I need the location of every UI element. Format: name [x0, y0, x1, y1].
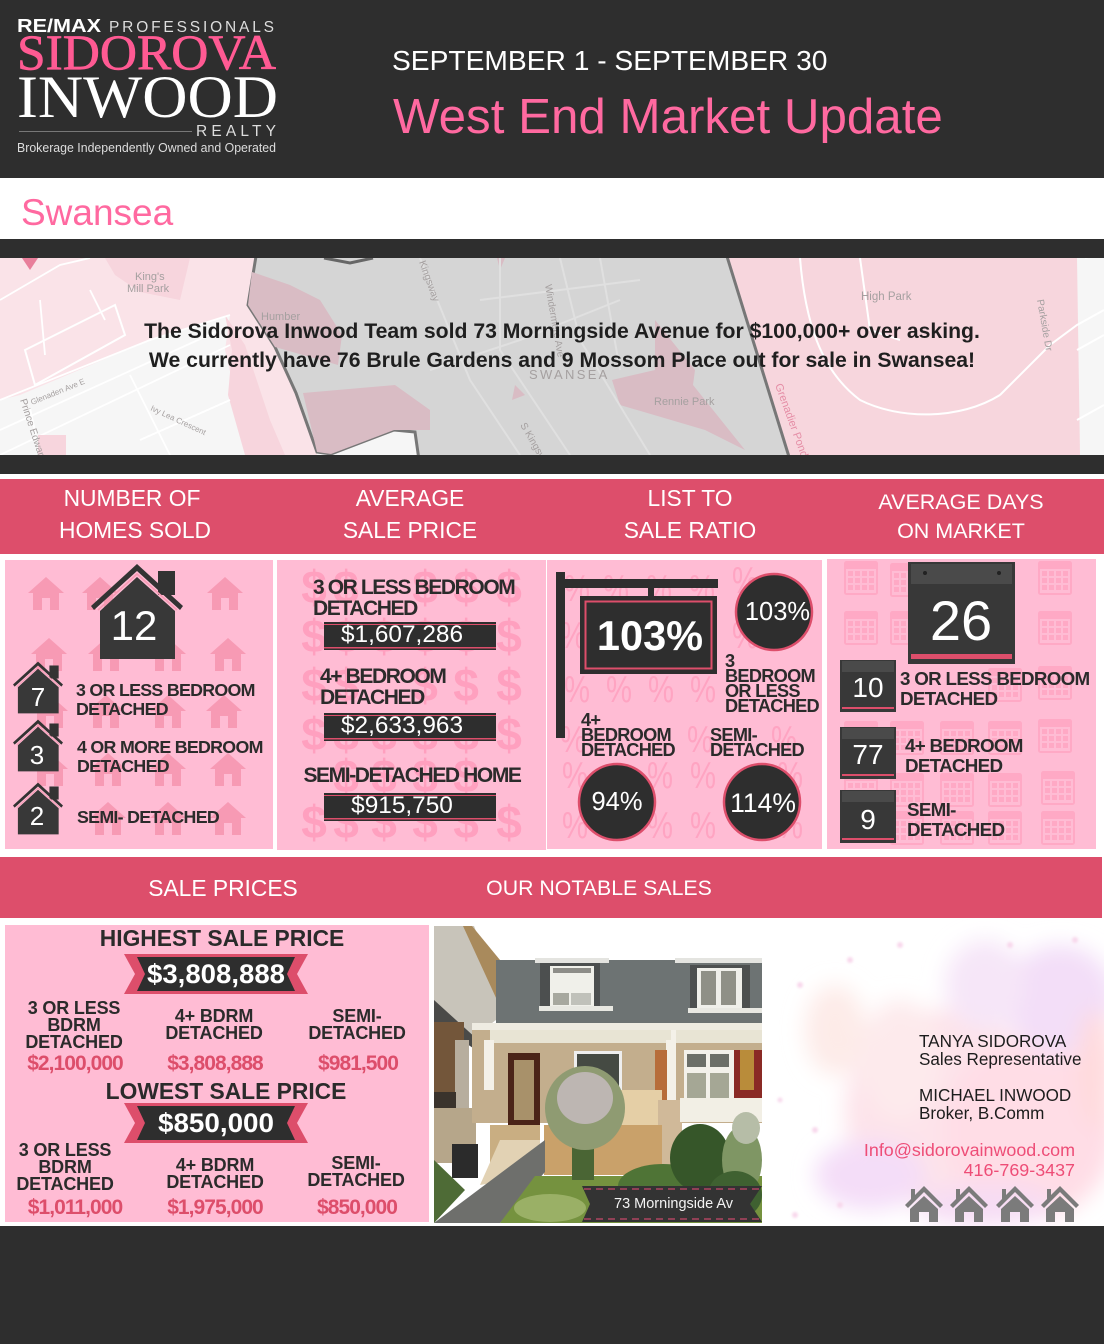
map banner [0, 239, 1104, 474]
stat headings band: AVERAGE [356, 485, 464, 511]
icon: house 2 [13, 783, 63, 834]
contact details: Info@sidorovainwood.com [864, 1140, 1075, 1160]
panel: average sale price: $ [412, 796, 438, 848]
label: 3 bedroom or less: 3 [725, 651, 735, 671]
panel: list to sale ratio: % [732, 615, 758, 657]
label: 3 or less days: 3 OR LESS BEDROOM [900, 668, 1090, 689]
ribbon: highest price: $3,808,888 [147, 959, 285, 989]
circle: 94%: 94% [591, 788, 643, 816]
label: 4 or more [77, 737, 263, 776]
photo caption ribbon [582, 1186, 762, 1222]
panel: homes sold [5, 560, 273, 849]
panel: average sale price: $ [453, 561, 479, 613]
icon: house 3 [13, 720, 63, 771]
neighbourhood heading: Swansea [21, 192, 174, 233]
label: 4+ days: DETACHED [905, 755, 1002, 776]
contact splash panel [778, 937, 1104, 1225]
panel: list to sale ratio: % [564, 669, 590, 711]
panel: average sale price: $ [371, 750, 397, 802]
label: 4+ price: 4+ BEDROOM [320, 665, 446, 688]
section band [0, 857, 1102, 918]
icon: calendar 10: 10 [852, 672, 884, 703]
map labels: Glenaden Ave E [29, 377, 86, 407]
panel: list to sale ratio: % [771, 719, 797, 761]
col: 3 or less low [16, 1140, 122, 1219]
map labels: High Park [861, 291, 912, 303]
col: 4+ high: DETACHED [165, 1023, 263, 1043]
heading: highest: HIGHEST SALE PRICE [100, 925, 344, 951]
map labels: Windermere Ave [542, 284, 566, 359]
panel: list to sale ratio: % [687, 719, 713, 761]
panel: list to sale ratio: % [647, 755, 673, 797]
label: 3 bedroom or less [725, 651, 820, 716]
circle: 114% [724, 764, 800, 840]
label: 4+ days: 4+ BEDROOM [905, 735, 1023, 756]
panel: average sale price: $ [412, 610, 438, 662]
icon: large calendar 26 [908, 562, 1015, 664]
col: 4+ low: 4+ BDRM [176, 1155, 254, 1175]
footer band [0, 1226, 1104, 1344]
panel: list to sale ratio: % [777, 805, 803, 847]
main title: West End Market Update [393, 89, 943, 144]
label: 3 bedroom or less: OR LESS [725, 681, 800, 701]
col: semi high: DETACHED [308, 1023, 406, 1043]
stat headings band: LIST TO [648, 485, 732, 511]
col: 4+ high [165, 1006, 264, 1075]
label: 3 or less days: DETACHED [900, 688, 997, 709]
section band: OUR NOTABLE SALES [486, 876, 712, 900]
map message [144, 320, 980, 372]
col: 3 or less high [25, 998, 123, 1075]
col: semi low: SEMI- [331, 1153, 381, 1173]
label: semi-detached [710, 725, 805, 760]
ribbon: lowest price [124, 1103, 308, 1143]
label: semi price: SEMI-DETACHED HOME [303, 764, 522, 787]
icon: calendar 77 [840, 727, 896, 779]
panel: list to sale ratio: % [690, 669, 716, 711]
panel: list to sale ratio: % [732, 560, 758, 602]
label: semi days: SEMI- [907, 799, 956, 820]
panel: list to sale ratio: % [564, 568, 590, 610]
price bar 2: $2,633,963 [341, 712, 463, 739]
label: 3 or less price: 3 OR LESS BEDROOM [313, 576, 515, 599]
icon: house 2: 2 [30, 801, 44, 831]
stat headings band: ON MARKET [897, 519, 1025, 543]
panel: list to sale ratio: % [603, 568, 629, 610]
label: 4+ bedroom [581, 710, 676, 760]
heading: lowest: LOWEST SALE PRICE [106, 1078, 346, 1104]
logo: SIDOROVA [17, 24, 276, 80]
label: 4+ bedroom: 4+ [581, 710, 600, 730]
label: semi: SEMI- DETACHED [77, 807, 220, 827]
circle: 103% [736, 574, 812, 650]
label: 3 or less price: DETACHED [313, 597, 418, 620]
price bar 1: $1,607,286 [341, 621, 463, 648]
col: semi high: $981,500 [318, 1052, 398, 1075]
map labels: Prince Edward [17, 398, 48, 463]
col: semi high: SEMI- [332, 1006, 382, 1026]
panel: list to sale ratio: % [646, 568, 672, 610]
icon: large house 12 [91, 564, 183, 659]
panel: average sale price: $ [412, 750, 438, 802]
label: 3 or less price [313, 576, 515, 620]
panel: average sale price: $ [301, 561, 327, 613]
ribbon: lowest price: $850,000 [158, 1108, 274, 1138]
map message: The Sidorova Inwood Team sold 73 Morningside Avenue for $100,000+ over asking. [144, 320, 980, 343]
date range: SEPTEMBER 1 - SEPTEMBER 30 [392, 44, 827, 76]
label: 3 or less [76, 680, 255, 719]
col: semi low [307, 1153, 405, 1219]
panel: list to sale ratio: % [647, 805, 673, 847]
col: 4+ low [166, 1155, 264, 1219]
panel: list to sale ratio: % [648, 669, 674, 711]
panel: average sale price: $ [371, 708, 397, 760]
icon: hanging sign 103%: 103% [597, 612, 703, 659]
panel: average sale price: $ [333, 796, 359, 848]
contact names: Sales Representative [919, 1050, 1081, 1069]
panel: list to sale ratio: % [606, 669, 632, 711]
label: 4+ days [905, 735, 1023, 776]
icon: large calendar 26: 26 [930, 589, 992, 652]
col: 3 or less low: DETACHED [16, 1174, 114, 1194]
col: 3 or less high: BDRM [47, 1015, 101, 1035]
map labels [17, 259, 1054, 472]
panel: average sale price: $ [301, 796, 327, 848]
col: 3 or less low: $1,011,000 [28, 1196, 122, 1219]
logo: PROFESSIONALS [109, 19, 274, 36]
stat headings band: SALE RATIO [624, 517, 756, 543]
panel: average sale price: $ [496, 659, 522, 711]
icon: house 7 [13, 662, 63, 713]
panel: average sale price: $ [333, 708, 359, 760]
paint spatter [778, 937, 1078, 1218]
logo: RE/MAX [17, 16, 101, 36]
label: 4+ price [320, 665, 446, 709]
col: 4+ low: $1,975,000 [167, 1196, 263, 1219]
header band [0, 0, 1104, 178]
col: 3 or less low: 3 OR LESS [19, 1140, 111, 1160]
price bar 3 [324, 792, 496, 821]
label: 4+ bedroom: BEDROOM [581, 725, 671, 745]
logo [17, 16, 278, 155]
panel: list to sale ratio: % [690, 805, 716, 847]
price bar 3: $915,750 [351, 792, 453, 819]
icon: house 7: 7 [31, 682, 45, 712]
logo: REALTY [196, 123, 276, 140]
label: 4+ price: DETACHED [320, 686, 425, 709]
circle: 94% [579, 764, 655, 840]
label: semi-detached: SEMI- [710, 725, 758, 745]
panel: list to sale ratio: % [690, 755, 716, 797]
price bar 1 [324, 621, 496, 650]
contact names: TANYA SIDOROVA [919, 1032, 1067, 1051]
photo caption ribbon: 73 Morningside Av [614, 1196, 734, 1212]
col: semi low: DETACHED [307, 1170, 405, 1190]
stat headings band [0, 479, 1104, 554]
map labels: Ivy Lea Crescent [149, 404, 208, 438]
map labels: Kingsway [416, 259, 441, 303]
panel: list to sale ratio: % [560, 719, 586, 761]
panel: list to sale ratio: % [777, 755, 803, 797]
contact details [864, 1140, 1075, 1180]
icon: calendar 77: 77 [852, 739, 884, 770]
map message: We currently have 76 Brule Gardens and 9 Mossom Place out for sale in Swansea! [149, 349, 975, 372]
label: 4 or more: 4 OR MORE BEDROOM [77, 737, 263, 757]
panel: list to sale ratio: % [560, 615, 586, 657]
flowering shrub [545, 1066, 625, 1180]
contact names: MICHAEL INWOOD [919, 1086, 1071, 1105]
panel: average sale price: $ [453, 659, 479, 711]
panel: average sale price: $ [301, 610, 327, 662]
label: semi-detached: DETACHED [710, 740, 805, 760]
col: 3 or less high: 3 OR LESS [28, 998, 120, 1018]
panel: average sale price: $ [496, 708, 522, 760]
map labels: SWANSEA [529, 367, 610, 382]
panel: days on market [827, 559, 1096, 849]
panel: list to sale ratio: % [562, 755, 588, 797]
logo: Brokerage Independently Owned and Operated [17, 141, 276, 155]
stat headings band: AVERAGE DAYS [878, 490, 1044, 514]
panel: average sale price: $ [453, 610, 479, 662]
map labels: Parkside Dr [1034, 299, 1054, 353]
col: 3 or less high: $2,100,000 [27, 1052, 123, 1075]
col: 4+ high: $3,808,888 [167, 1052, 264, 1075]
map labels: S Kingsway [517, 421, 553, 472]
label: 3 or less days [900, 668, 1090, 709]
Swansea boundary [248, 250, 790, 460]
panel: average sale price: $ [301, 659, 327, 711]
icon: house 3: 3 [30, 740, 44, 770]
map labels: Humber [261, 311, 300, 323]
panel: list to sale ratio [547, 560, 822, 849]
panel: average sale price [277, 560, 546, 850]
panel: list to sale ratio: % [562, 805, 588, 847]
label: 4 or more: DETACHED [77, 756, 170, 776]
panel: average sale price: $ [453, 708, 479, 760]
panel: average sale price: $ [333, 610, 359, 662]
col: 4+ high: 4+ BDRM [175, 1006, 253, 1026]
contact details: 416-769-3437 [964, 1160, 1075, 1180]
contact names: Broker, B.Comm [919, 1104, 1044, 1123]
stat headings band: SALE PRICE [343, 517, 477, 543]
col: 3 or less low: BDRM [38, 1157, 92, 1177]
label: semi days: DETACHED [907, 819, 1004, 840]
panel: average sale price: $ [412, 708, 438, 760]
col: 3 or less high: DETACHED [25, 1032, 123, 1052]
contact names [919, 1032, 1081, 1123]
panel: average sale price: $ [333, 750, 359, 802]
col: semi low: $850,000 [317, 1196, 397, 1219]
logo: INWOOD [17, 64, 278, 130]
panel: sale prices [5, 925, 429, 1222]
panel: average sale price: $ [333, 561, 359, 613]
panel: average sale price: $ [412, 659, 438, 711]
panel: average sale price: $ [496, 610, 522, 662]
price bar 2 [324, 712, 496, 741]
label: 3 or less: DETACHED [76, 699, 169, 719]
label: 3 or less: 3 OR LESS BEDROOM [76, 680, 255, 700]
panel: average sale price: $ [371, 610, 397, 662]
panel: average sale price: $ [412, 561, 438, 613]
panel: average sale price: $ [301, 708, 327, 760]
panel: average sale price: $ [496, 561, 522, 613]
icon: calendar 9: 9 [860, 804, 876, 835]
panel: average sale price: $ [453, 750, 479, 802]
map labels: Mill Park [127, 283, 170, 295]
photo: 73 Morningside [434, 926, 762, 1223]
icon row: houses [905, 1186, 1079, 1222]
label: semi days [907, 799, 1004, 840]
stat headings band: NUMBER OF [64, 485, 200, 511]
panel: average sale price: $ [496, 796, 522, 848]
map labels: Grenadier Pond [772, 382, 810, 459]
stat headings band: HOMES SOLD [59, 517, 211, 543]
panel: average sale price: $ [333, 659, 359, 711]
section band: SALE PRICES [148, 875, 298, 901]
icon: calendar 10 [840, 660, 896, 712]
label: 4+ bedroom: DETACHED [581, 740, 676, 760]
icon: hanging sign 103% [556, 572, 718, 738]
panel: average sale price: $ [453, 796, 479, 848]
label: 3 bedroom or less: BEDROOM [725, 666, 815, 686]
panel: average sale price: $ [371, 796, 397, 848]
panel: list to sale ratio: % [689, 568, 715, 610]
circle: 114%: 114% [730, 788, 796, 818]
ribbon: highest price [124, 954, 308, 994]
col: semi high [308, 1006, 406, 1075]
map labels: Rennie Park [654, 396, 715, 408]
icon: calendar 9 [840, 790, 896, 843]
icon: large house 12: 12 [111, 602, 157, 649]
col: 4+ low: DETACHED [166, 1172, 264, 1192]
label: 3 bedroom or less: DETACHED [725, 696, 820, 716]
circle: 103%: 103% [745, 598, 810, 626]
map labels: King's [135, 271, 165, 283]
